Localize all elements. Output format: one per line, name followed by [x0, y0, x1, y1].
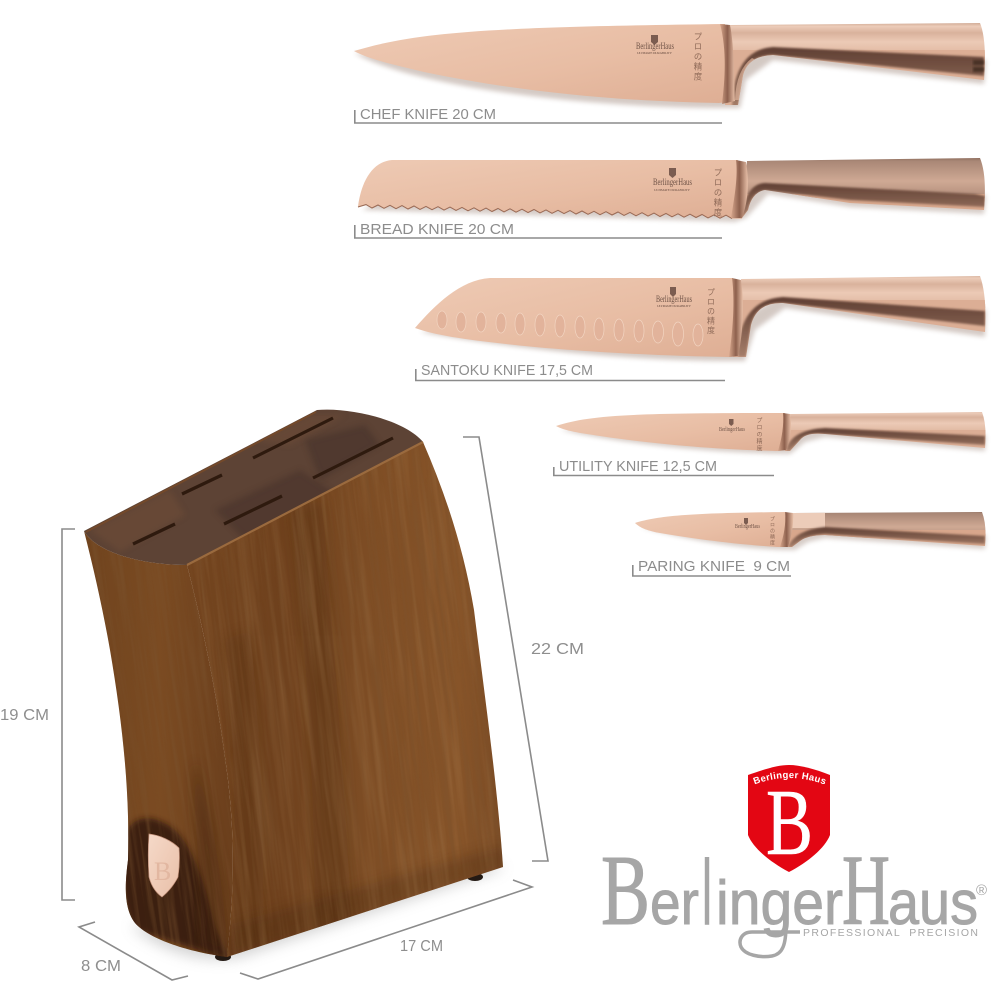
utility blade — [556, 413, 787, 451]
chef handle — [725, 22, 990, 110]
logo wordmark: aus — [888, 869, 978, 938]
paring blade logo: BerlingerHaus — [735, 524, 760, 530]
bread japanese marks: プロの精度 — [713, 168, 723, 218]
santoku blade — [415, 278, 738, 357]
knife: santoku knife — [415, 274, 990, 361]
paring blade logo — [735, 518, 760, 530]
logo wordmark: B — [601, 834, 650, 946]
logo wordmark: ® — [976, 882, 987, 899]
block front face — [187, 442, 503, 957]
utility handle — [785, 412, 986, 451]
utility blade logo: BerlingerHaus — [719, 426, 745, 433]
chef blade logo: ULTIMATE DURABILITY — [637, 51, 672, 55]
santoku blade logo — [656, 287, 692, 308]
label: chef knife: CHEF KNIFE 20 CM — [360, 107, 496, 123]
logo wordmark: H — [842, 834, 890, 946]
bread blade — [358, 160, 742, 219]
chef japanese marks: プロの精度 — [693, 32, 703, 82]
dimension: depth 8 cm: 8 CM — [81, 958, 121, 975]
brand logo — [601, 765, 987, 958]
paring japanese marks: プロの精度 — [769, 516, 775, 546]
chef blade — [354, 24, 728, 103]
block side face — [84, 531, 233, 957]
santoku handle — [730, 274, 990, 360]
chef blade logo: BerlingerHaus — [636, 42, 674, 52]
logo wordmark: er — [650, 869, 699, 938]
santoku blade logo: ULTIMATE DURABILITY — [657, 304, 691, 308]
logo wordmark — [601, 834, 987, 957]
logo shield: Berlinger Haus — [753, 772, 826, 784]
paring handle — [788, 512, 986, 547]
santoku dimples — [437, 311, 703, 346]
santoku japanese marks: プロの精度 — [706, 288, 716, 336]
bread blade logo: BerlingerHaus — [653, 178, 692, 188]
utility blade logo — [719, 419, 745, 433]
logo wordmark: inger — [716, 869, 843, 938]
label: santoku knife — [416, 363, 725, 380]
knife: bread knife — [358, 156, 990, 222]
block top surface — [84, 410, 423, 565]
logo shield: B — [766, 771, 813, 875]
block feet — [215, 953, 231, 961]
knife: paring knife — [635, 510, 990, 550]
label: bread knife — [355, 222, 722, 238]
dimension: width 17 cm: 17 CM — [400, 938, 443, 955]
bread blade logo: ULTIMATE DURABILITY — [654, 188, 690, 192]
dimension: width 17 cm — [240, 880, 532, 979]
knife block — [84, 410, 503, 965]
label: chef knife — [355, 107, 722, 123]
label: santoku knife: SANTOKU KNIFE 17,5 CM — [421, 363, 593, 379]
utility japanese marks: プロの精度 — [755, 417, 762, 452]
knife: utility knife — [556, 410, 990, 454]
label: paring knife: PARING KNIFE 9 CM — [638, 559, 790, 575]
knife: chef knife — [354, 22, 990, 110]
chef blade logo — [636, 35, 674, 55]
santoku blade logo: BerlingerHaus — [656, 294, 692, 304]
bread blade logo — [653, 168, 692, 192]
label: bread knife: BREAD KNIFE 20 CM — [360, 222, 514, 238]
label: utility knife: UTILITY KNIFE 12,5 CM — [559, 459, 717, 475]
block knife slots — [133, 418, 393, 544]
paring blade — [635, 512, 788, 547]
block ground shadow — [130, 860, 505, 959]
block rose gold badge: B — [154, 857, 171, 886]
bread handle — [742, 158, 985, 218]
logo wordmark: l — [702, 842, 712, 944]
dimension: height 19 cm — [0, 529, 75, 900]
dimension: height 22 cm: 22 CM — [531, 641, 584, 658]
dimension: height 22 cm — [463, 437, 584, 861]
dimension: height 19 cm: 19 CM — [0, 707, 49, 724]
block rose gold badge — [148, 834, 179, 897]
dimension: depth 8 cm — [79, 922, 188, 980]
logo tagline: PROFESSIONAL PRECISION — [803, 927, 978, 939]
